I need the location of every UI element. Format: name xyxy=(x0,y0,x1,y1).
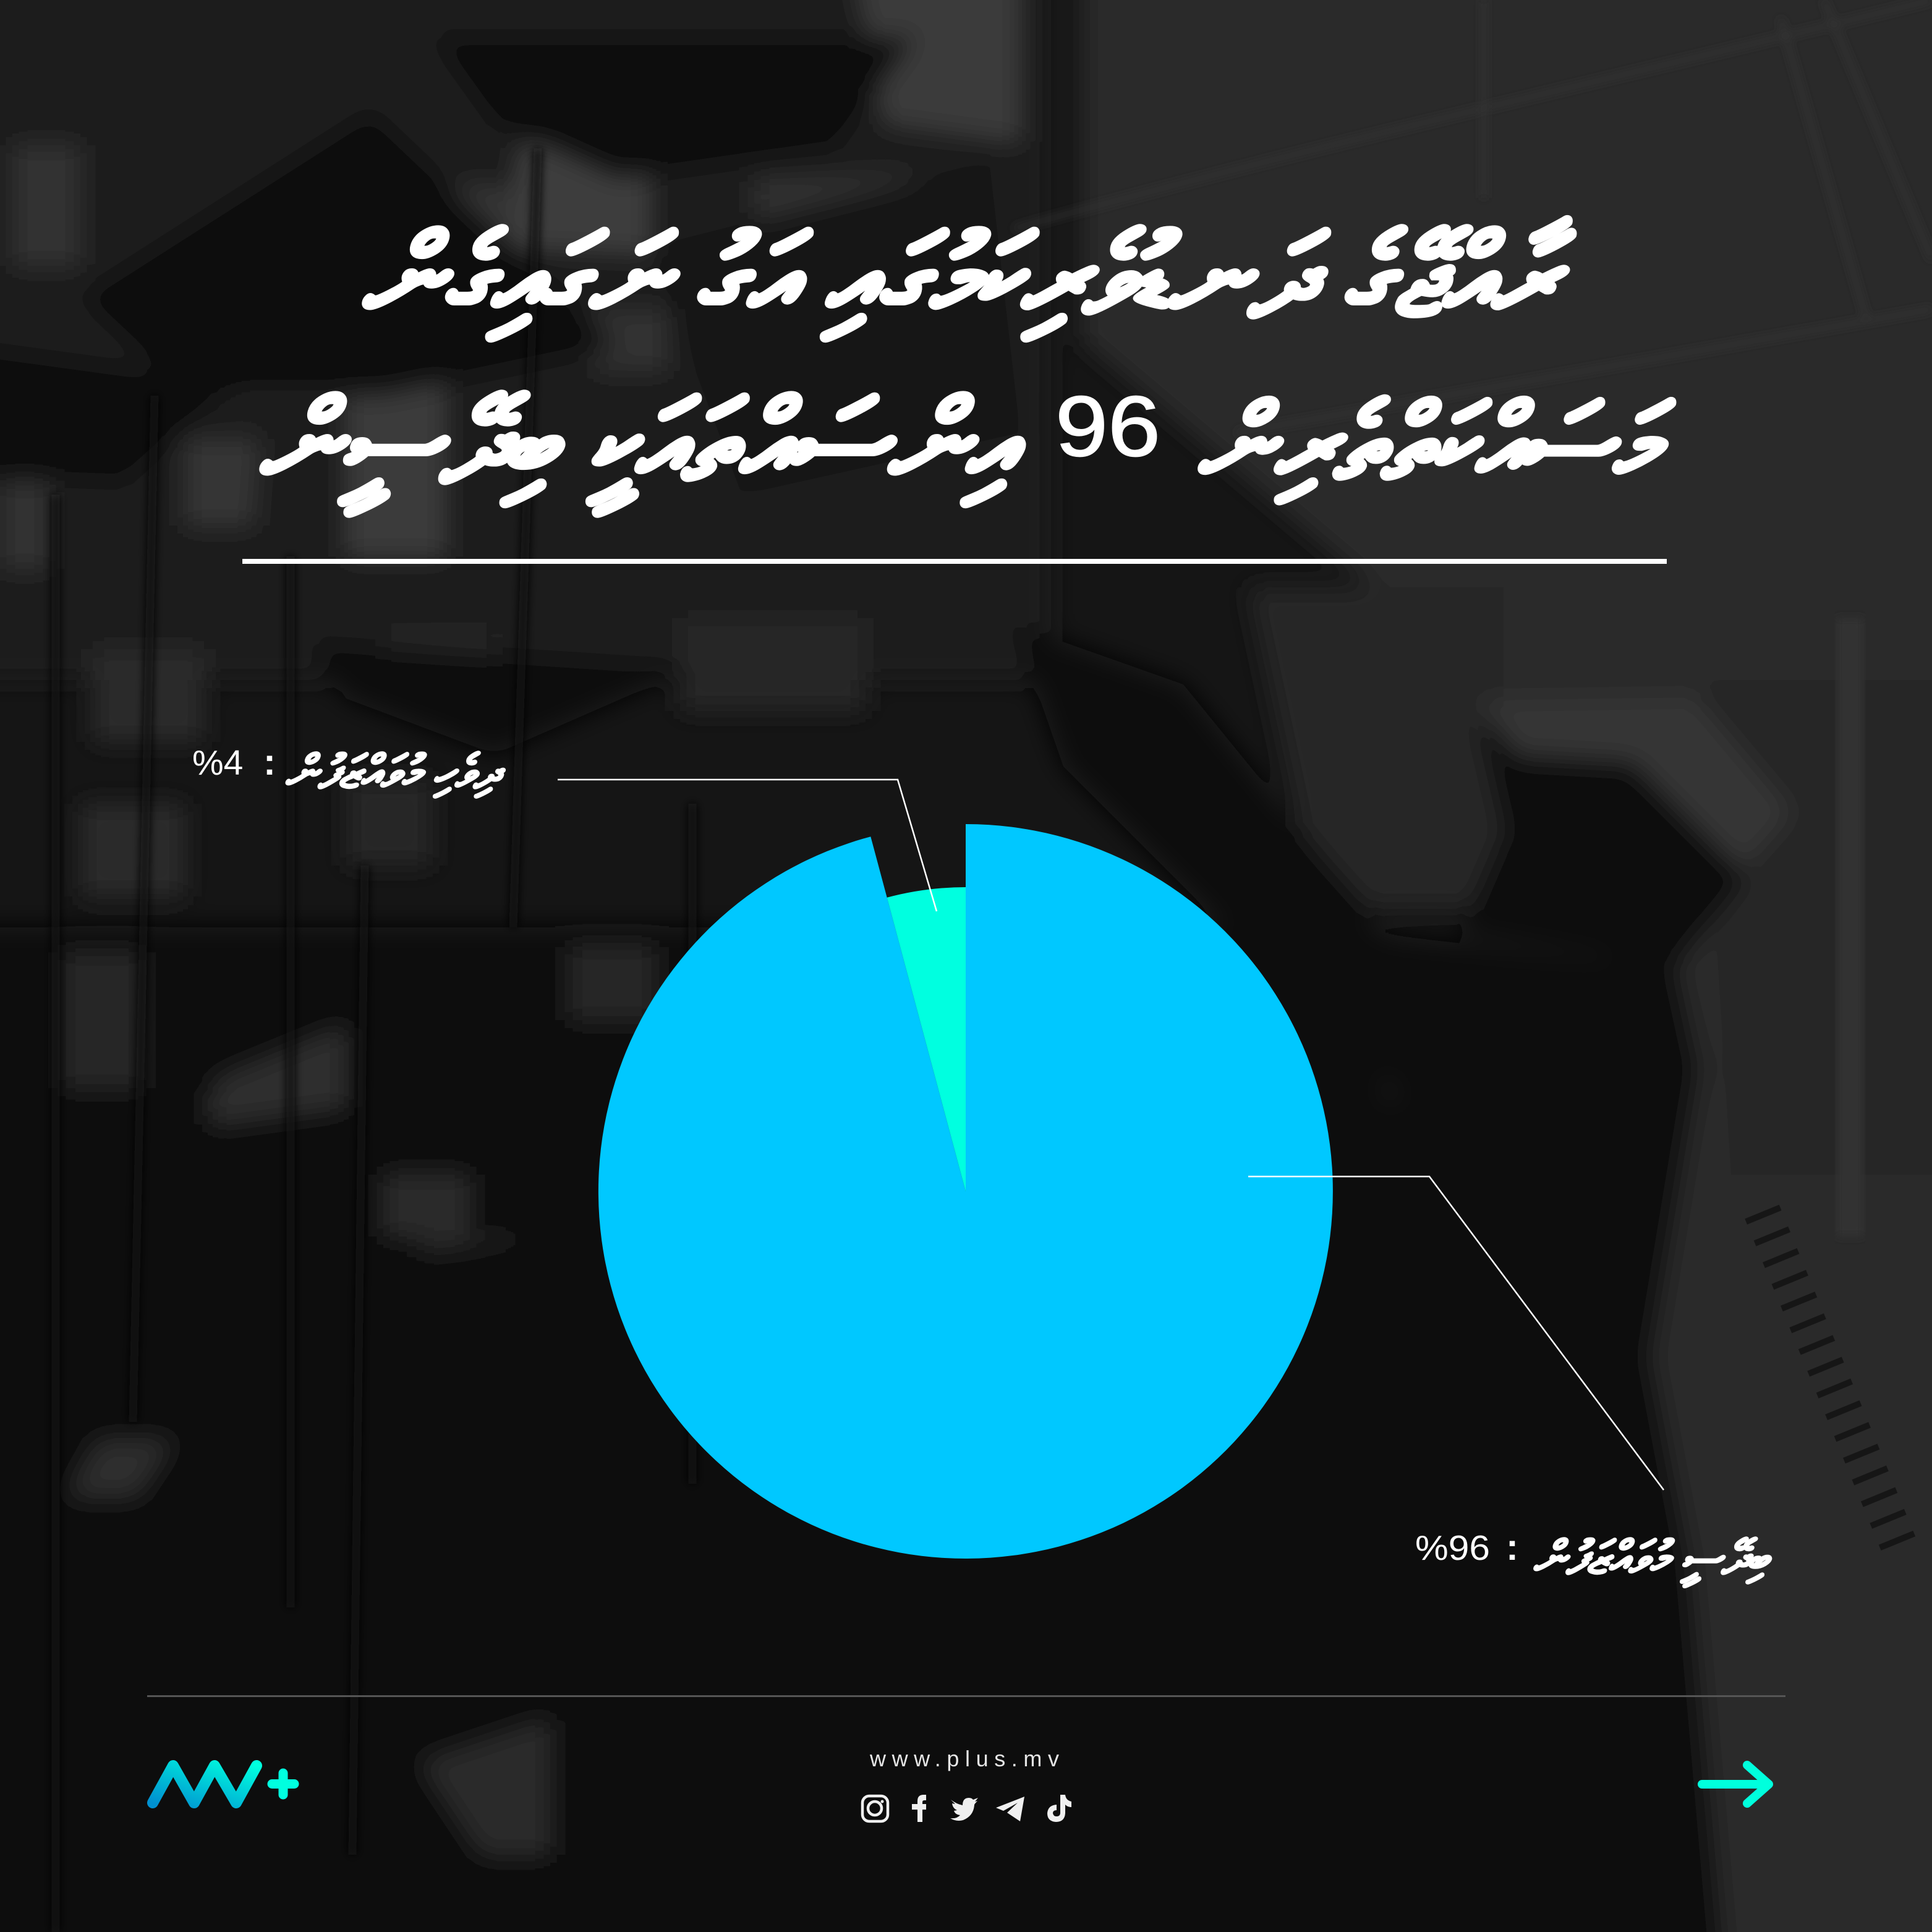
callout line: 4% xyxy=(558,780,937,911)
title line 2: އިންސައްތައަކީ ބިދޭސީން xyxy=(259,378,1025,517)
website url: www.plus.mv xyxy=(869,1746,1059,1771)
label: foreign employees 96% xyxy=(1415,1526,1772,1588)
title line 1: ރާއްޖޭގެ ދަނޑުވެރިކަމުގައި އަގު ނަގައިގެން xyxy=(362,213,1576,342)
label: foreign employees 96%: ބިދޭސީ މުވައްޒަފުން xyxy=(1533,1532,1772,1588)
label: foreign employees 96%: %96 xyxy=(1415,1528,1490,1568)
title line 2: 96 xyxy=(1055,379,1160,474)
title divider xyxy=(242,559,1667,564)
footer divider xyxy=(147,1695,1785,1697)
slice: local employees 4% xyxy=(887,887,966,1191)
logo: MV+ xyxy=(153,1766,294,1803)
icon: instagram xyxy=(862,1796,888,1821)
icon: twitter xyxy=(950,1798,978,1821)
title line 2: މަސައްކަތްތެރިން xyxy=(1198,385,1676,504)
label: foreign employees 96%: : xyxy=(1506,1526,1518,1568)
arrow xyxy=(1702,1765,1769,1803)
label: local employees 4%: %4 xyxy=(192,743,243,783)
icon: tiktok xyxy=(1047,1795,1071,1822)
slice: foreign employees 96% xyxy=(598,824,1333,1559)
social icons xyxy=(862,1795,1071,1822)
callout line: 96% xyxy=(1248,1177,1664,1490)
icon: telegram xyxy=(996,1797,1024,1821)
label: local employees 4%: : xyxy=(263,741,276,783)
label: local employees 4%: ދިވެހި މުވައްޒަފުން xyxy=(285,746,506,799)
title line 2 xyxy=(259,378,1676,517)
label: local employees 4% xyxy=(192,741,506,799)
title xyxy=(259,213,1676,517)
icon: facebook xyxy=(912,1795,926,1822)
pie chart xyxy=(598,824,1333,1559)
